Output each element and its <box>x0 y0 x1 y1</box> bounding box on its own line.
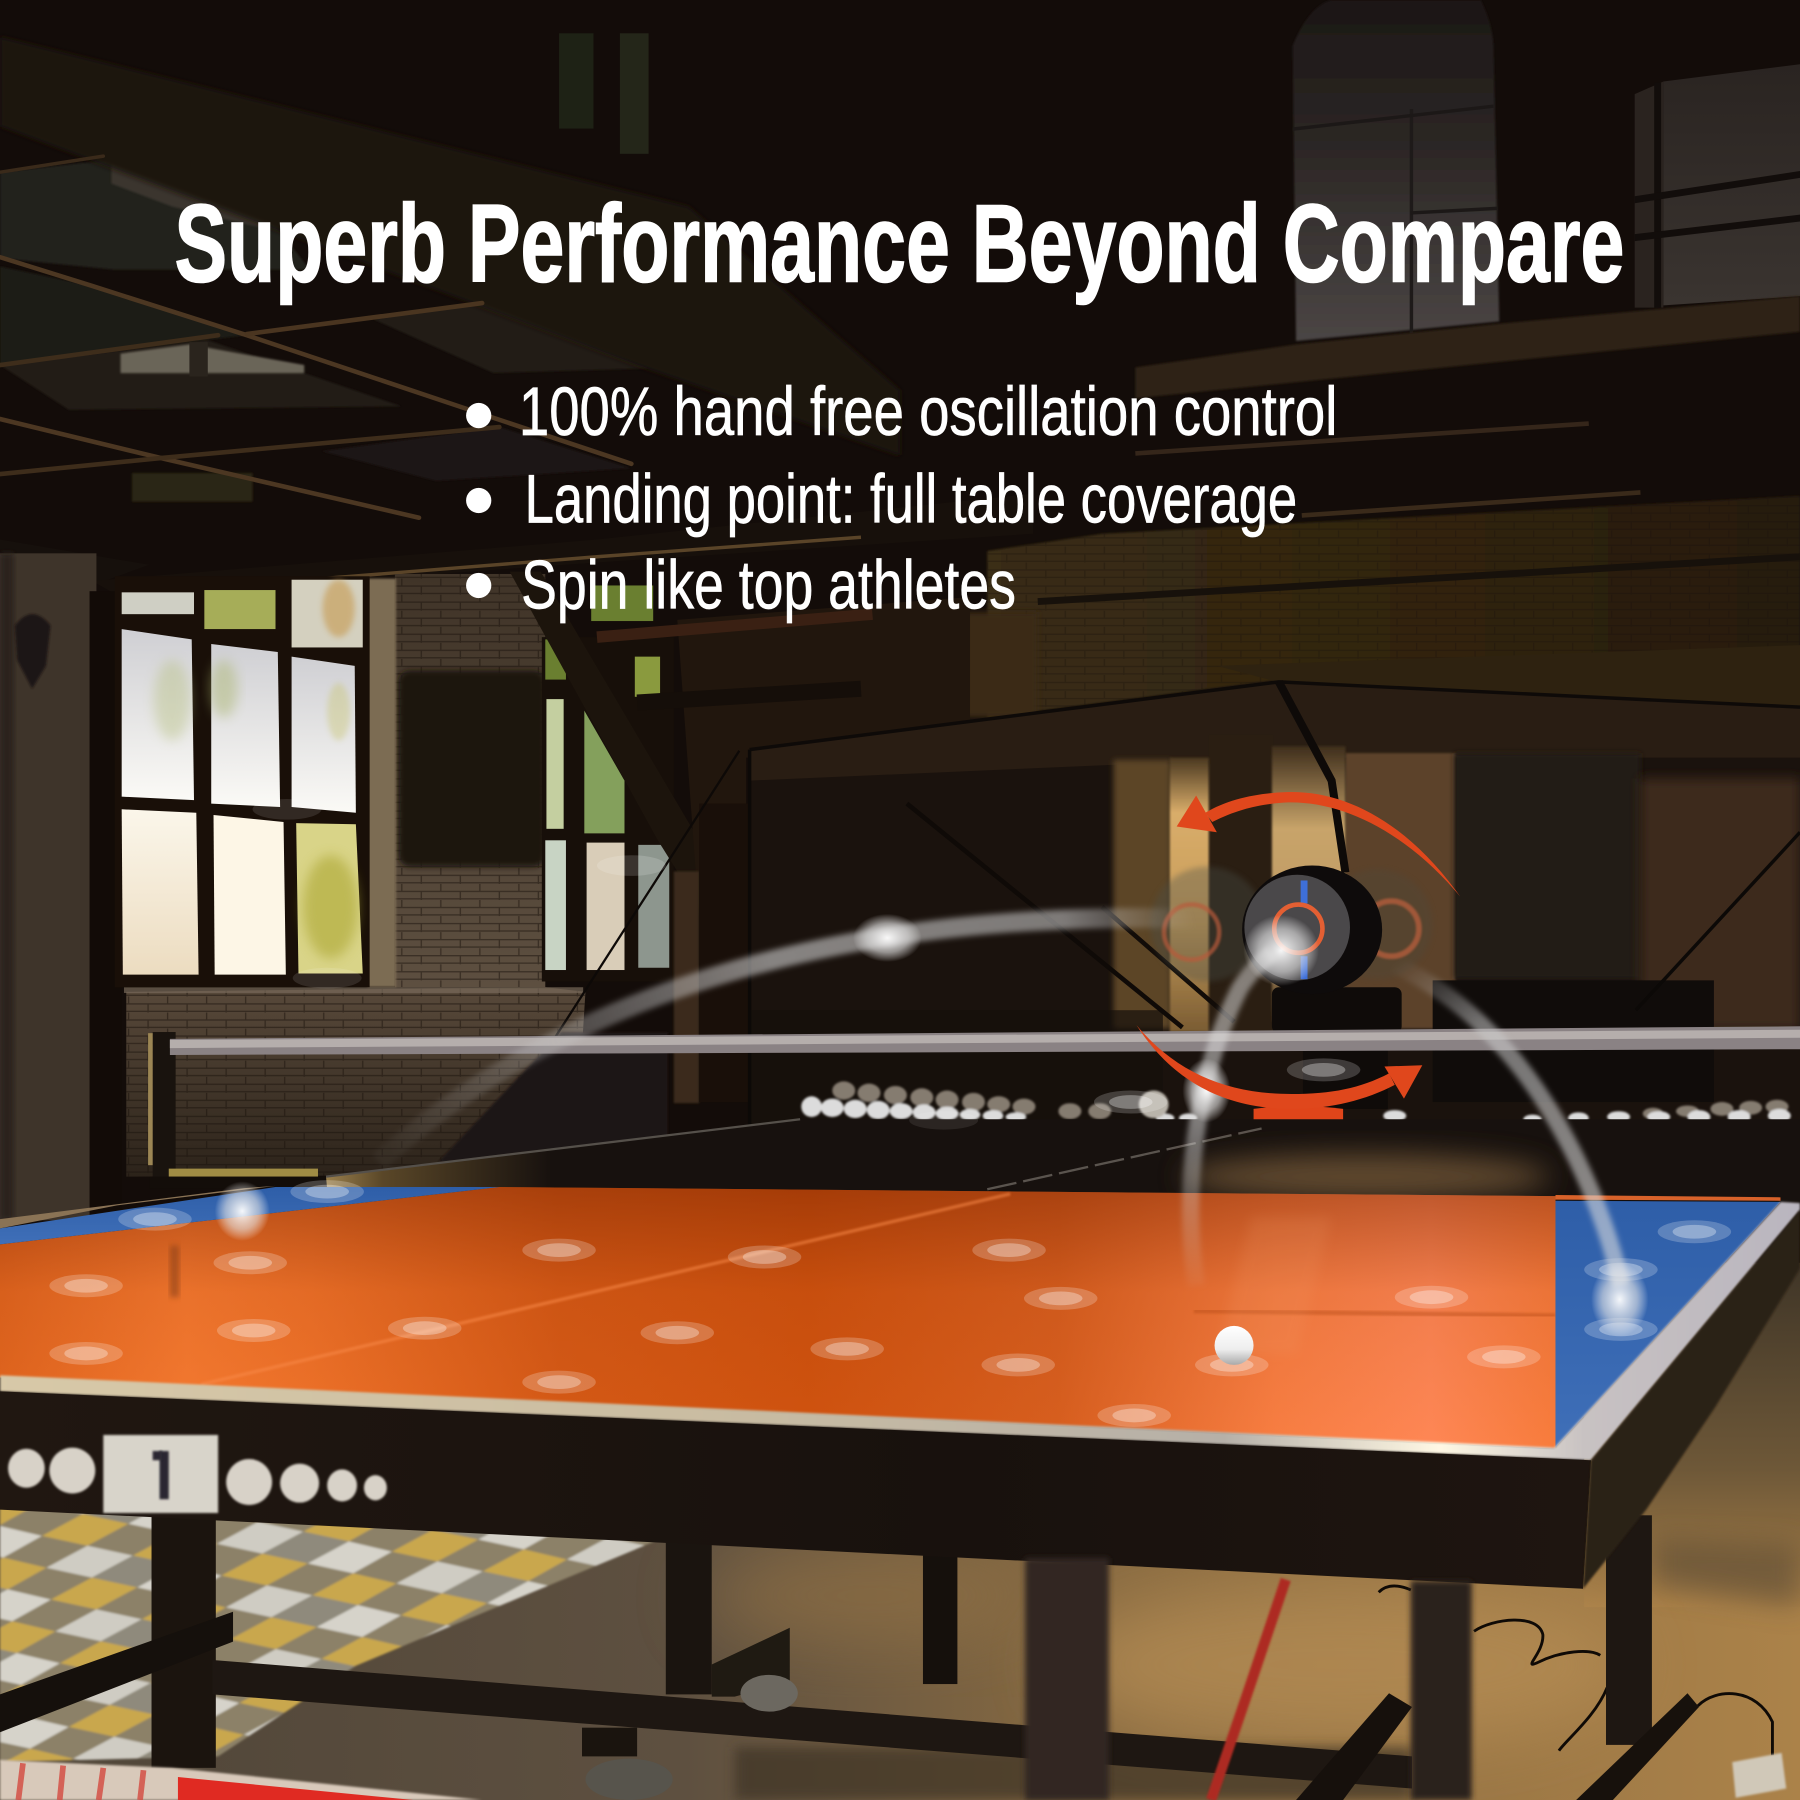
blue zone right <box>1555 1201 1780 1448</box>
power socket <box>1732 1753 1786 1798</box>
feature list: Landing point: full table coverage <box>525 460 1297 537</box>
upper right beams and brick wall <box>963 296 1800 717</box>
window right of brick wall <box>542 585 674 982</box>
ball net enclosure <box>750 682 1800 1148</box>
wheels <box>582 1628 798 1800</box>
feature list: 100% hand free oscillation control <box>519 373 1337 450</box>
upper right windows <box>1293 0 1800 341</box>
orange zone <box>0 1187 1780 1449</box>
robot machine with ghost positions <box>1150 866 1433 1123</box>
red machine base <box>1254 1106 1343 1123</box>
white table edges <box>0 1202 1800 1460</box>
oscillation arrow: upper <box>1177 792 1460 897</box>
floor cables <box>1379 1586 1772 1755</box>
ball trajectories <box>379 918 1621 1286</box>
number plate <box>103 1435 218 1513</box>
net <box>148 1026 1800 1188</box>
ball landing points <box>49 799 1731 1427</box>
oscillation arrow: lower <box>1136 1025 1422 1109</box>
ceiling structure <box>0 33 1033 597</box>
white ball on table <box>1215 1326 1254 1365</box>
bottom barrier strip <box>0 1760 482 1800</box>
table score marks <box>8 1448 387 1505</box>
ball hopper rows <box>801 1081 1791 1124</box>
window left <box>115 576 370 987</box>
left pillar and brick walls <box>0 553 585 1220</box>
floor <box>0 1263 1800 1800</box>
table skirt and legs <box>0 1210 1800 1800</box>
feature list: Spin like top athletes <box>521 546 1016 623</box>
patterned floor tiles <box>0 1498 657 1762</box>
feature list <box>466 373 1337 623</box>
ball motion glows <box>215 914 1648 1336</box>
staircase <box>439 572 970 1162</box>
table top <box>0 1119 1800 1460</box>
far half of table <box>326 1119 1800 1201</box>
red cable <box>1211 1580 1286 1800</box>
blue zone left <box>0 1187 499 1244</box>
